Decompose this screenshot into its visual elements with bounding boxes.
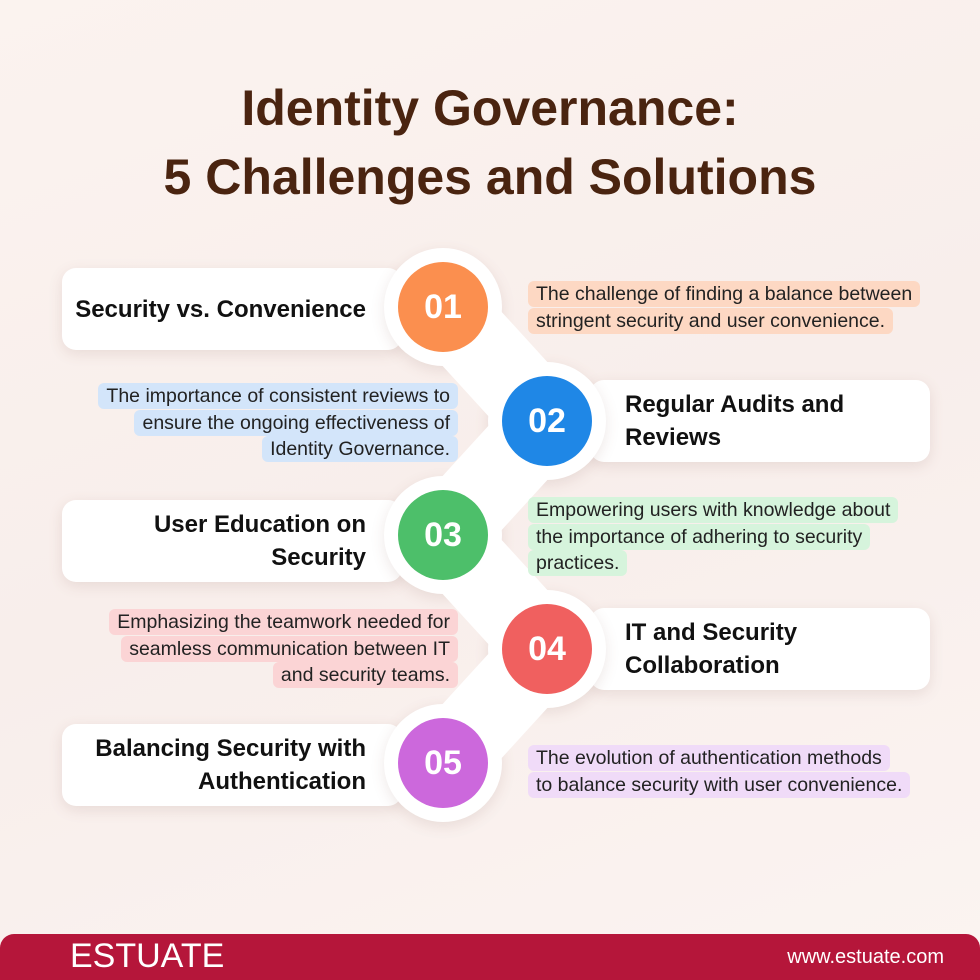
card 3 [62,500,402,582]
desc 3: Empowering users with knowledge about [536,499,890,521]
footer [0,934,980,980]
card 5 [62,724,402,806]
card 5: Authentication [198,768,366,795]
circle 03 [398,490,488,580]
rings [384,248,502,366]
desc 1: stringent security and user convenience. [536,310,885,332]
card 5: Balancing Security with [95,735,366,762]
title [164,80,816,205]
card 3: Security [271,544,366,571]
card 2 [590,380,930,462]
desc 3: the importance of adhering to security [536,526,862,548]
desc 1: The challenge of finding a balance between [536,283,912,305]
circle 02 [502,376,592,466]
desc 2: ensure the ongoing effectiveness of [142,412,450,434]
desc 2: The importance of consistent reviews to [106,385,450,407]
desc 1 [528,281,920,334]
circle 02: 02 [528,402,566,440]
brand: ESTUATE [70,937,224,975]
desc 3: practices. [536,552,619,574]
desc 2: Identity Governance. [270,438,450,460]
card 1 [62,268,402,350]
card 1: Security vs. Convenience [75,296,366,322]
card 3: User Education on [154,511,366,538]
card 4: Collaboration [625,652,780,679]
card 4: IT and Security [625,619,797,646]
desc 4 [109,609,458,688]
desc 5: The evolution of authentication methods [536,747,882,769]
desc 5 [528,745,910,798]
circle 05 [398,718,488,808]
desc 4: seamless communication between IT [129,638,450,660]
circle 04 [502,604,592,694]
card 2: Regular Audits and [625,391,844,418]
card 4 [590,608,930,690]
url: www.estuate.com [787,946,944,968]
title: Identity Governance: [241,80,739,136]
circle 03: 03 [424,516,462,554]
title: 5 Challenges and Solutions [164,149,816,205]
circle 05: 05 [424,744,462,782]
desc 4: Emphasizing the teamwork needed for [117,611,450,633]
desc 2 [98,383,458,462]
desc 4: and security teams. [281,664,450,686]
circle 04: 04 [528,630,566,668]
desc 3 [528,497,898,576]
circle 01 [398,262,488,352]
card 2: Reviews [625,424,721,451]
circle 01: 01 [424,288,462,326]
desc 5: to balance security with user convenience. [536,774,902,796]
